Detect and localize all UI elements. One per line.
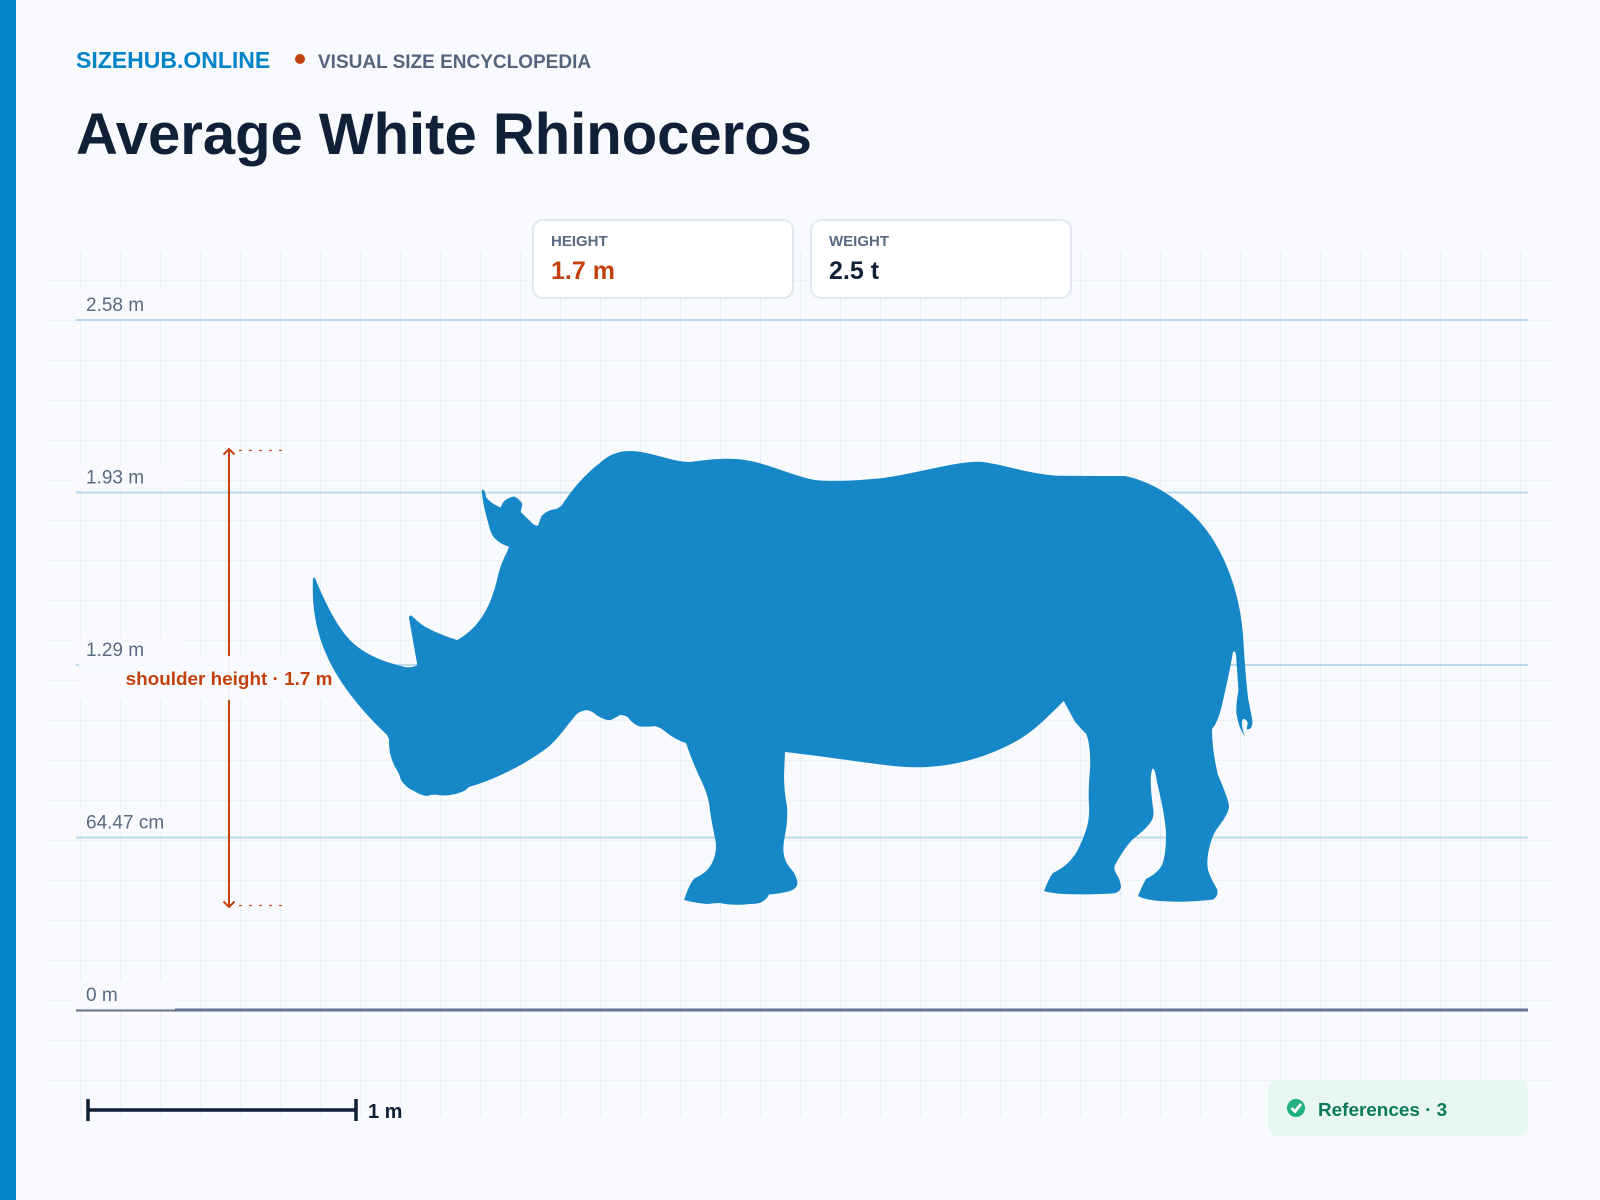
bar <box>88 1099 356 1121</box>
title: Average White Rhinoceros <box>76 102 812 167</box>
rhinoceros silhouette <box>313 451 1252 905</box>
weight label: WEIGHT <box>829 233 889 250</box>
shoulder height dimension arrow <box>79 449 379 907</box>
dimension label <box>79 656 379 700</box>
label: 0 m: 0 m <box>86 985 118 1006</box>
weight value: 2.5 t <box>829 257 880 285</box>
icon: check mark <box>1287 1099 1305 1117</box>
axis labels <box>76 290 180 1010</box>
label: 2.58 m: 2.58 m <box>86 295 144 316</box>
label: 1.93 m: 1.93 m <box>86 468 144 488</box>
height label: HEIGHT <box>551 233 608 250</box>
line: 64.47 cm <box>76 836 1528 838</box>
label: 2.58 m <box>76 290 180 319</box>
label: 1.29 m <box>76 635 180 664</box>
top extent tick <box>239 450 283 452</box>
stat card: weight <box>811 220 1071 298</box>
scale bar: 1 m <box>88 1099 402 1123</box>
tagline: VISUAL SIZE ENCYCLOPEDIA <box>318 52 591 73</box>
label: 0 m <box>76 980 175 1010</box>
references text: References · 3 <box>1318 1100 1447 1121</box>
scale reference lines <box>76 319 1528 1012</box>
brand name: SIZEHUB.ONLINE <box>76 47 270 73</box>
height value: 1.7 m <box>551 257 615 285</box>
label: 1.29 m: 1.29 m <box>86 640 144 661</box>
header: brand and tagline <box>76 47 591 73</box>
left accent bar <box>0 0 16 1200</box>
references badge <box>1268 1080 1528 1136</box>
label: 64.47 cm: 64.47 cm <box>86 812 164 834</box>
brand separator dot <box>295 54 305 64</box>
bottom extent tick <box>239 904 283 906</box>
stat card: height <box>533 220 793 298</box>
dimension label: shoulder height · 1.7 m <box>126 669 332 690</box>
ground line: 0 m <box>76 1008 1528 1012</box>
line: 2.58 m <box>76 319 1528 321</box>
bar label: 1 m <box>368 1101 402 1123</box>
line: 1.93 m <box>76 492 1528 494</box>
line: 1.29 m <box>76 664 1528 666</box>
label: 1.93 m <box>76 462 180 492</box>
label: 64.47 cm <box>76 808 180 836</box>
arrow shaft and heads <box>224 449 234 907</box>
